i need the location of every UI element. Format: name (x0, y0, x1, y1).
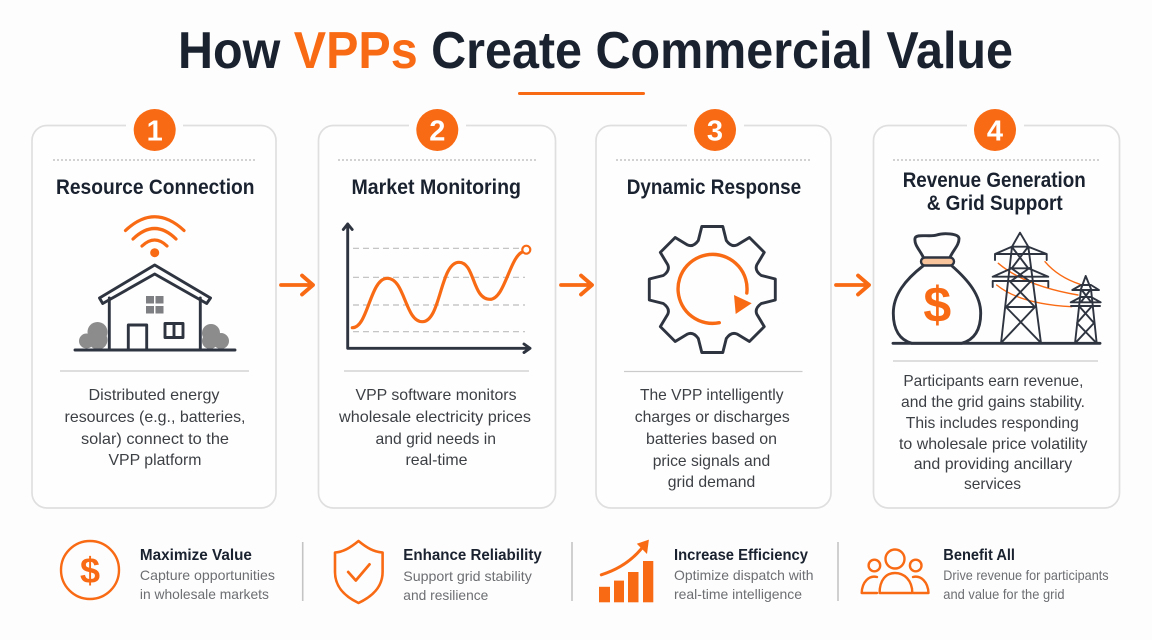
text: step 2 description: wholesale electricity prices (338, 409, 531, 426)
icon: shield check (335, 541, 383, 603)
line chart: price curve (343, 224, 530, 352)
badge 1 (134, 109, 176, 151)
benefit: maximize value: in wholesale markets (140, 587, 269, 602)
text: step 3 description: batteries based on (646, 431, 777, 448)
text: step 3 description: The VPP intelligently (640, 387, 784, 404)
benefit: enhance reliability: Enhance Reliability (403, 547, 542, 564)
icon: money bag: $ (923, 277, 951, 333)
badge 3: 3 (707, 116, 723, 148)
benefit: enhance reliability (335, 541, 542, 603)
arrow: step 2 to 3 (561, 276, 592, 294)
text: step 3 description: charges or discharges (635, 409, 790, 426)
badge 3 (694, 109, 736, 151)
text: step 4 description: to wholesale price volatility (899, 436, 1088, 453)
benefit: increase efficiency: Increase Efficiency (674, 547, 808, 564)
icon: transmission towers (893, 233, 1101, 343)
heading: revenue generation and grid support: Revenue Generation (903, 168, 1086, 192)
title: How VPPs Create Commercial Value (178, 22, 1013, 80)
icon: rising bars with arrow (599, 540, 653, 602)
text: step 4 description: and the grid gains stability. (901, 394, 1085, 411)
panel: step 2 market monitoring (318, 109, 556, 508)
panel: step 4 revenue generation and grid support (874, 109, 1120, 508)
badge 2 (416, 109, 458, 151)
icon: dollar circle (61, 541, 119, 599)
heading: dynamic response: Dynamic Response (627, 175, 801, 199)
benefit: increase efficiency: Optimize dispatch with (674, 568, 814, 583)
text: step 4 description: This includes responding (906, 415, 1079, 432)
text: step 3 description: price signals and (653, 453, 770, 470)
icon: house with wifi (75, 217, 235, 350)
text: step 4 description (899, 373, 1088, 493)
text: step 1 description: resources (e.g., batteries, (64, 409, 246, 426)
text: step 2 description (338, 387, 531, 469)
icon: gear with cycle arrow (649, 226, 775, 352)
benefit: enhance reliability: Support grid stability (403, 569, 532, 584)
benefit: increase efficiency (599, 540, 814, 602)
benefit: maximize value: Maximize Value (140, 547, 252, 564)
heading: resource connection: Resource Connection (56, 175, 254, 199)
badge 4: 4 (987, 116, 1003, 148)
text: step 2 description: real-time (406, 452, 468, 469)
arrow: step 1 to 2 (281, 276, 313, 294)
title underline (518, 92, 645, 95)
badge 2: 2 (429, 116, 445, 148)
icon: money bag (893, 234, 981, 343)
icon: three people (862, 550, 928, 593)
text: step 1 description: Distributed energy (88, 387, 220, 404)
badge 1: 1 (147, 116, 163, 148)
text: step 3 description (635, 387, 790, 491)
benefit: benefit all: and value for the grid (943, 587, 1064, 602)
text: step 4 description: Participants earn revenue, (903, 373, 1083, 390)
icon: dollar circle: $ (80, 550, 100, 591)
text: step 1 description: solar) connect to the (81, 431, 229, 448)
text: step 4 description: and providing ancillary (914, 456, 1072, 473)
benefit: maximize value (61, 541, 275, 602)
benefit: benefit all: Drive revenue for participants (943, 568, 1109, 583)
benefit: maximize value: Capture opportunities (140, 568, 275, 583)
text: step 2 description: and grid needs in (376, 431, 496, 448)
text: step 3 description: grid demand (668, 474, 755, 491)
heading: revenue generation and grid support (903, 168, 1086, 215)
text: step 1 description (64, 387, 246, 469)
benefit: benefit all: Benefit All (943, 547, 1015, 564)
text: step 1 description: VPP platform (108, 452, 202, 469)
text: step 4 description: services (964, 476, 1021, 493)
arrow: step 3 to 4 (836, 276, 869, 294)
heading: market monitoring: Market Monitoring (352, 175, 521, 199)
text: step 2 description: VPP software monitors (356, 387, 516, 404)
heading: revenue generation and grid support: & Grid Support (927, 191, 1063, 215)
benefit: enhance reliability: and resilience (403, 588, 489, 603)
panel: step 3 dynamic response (596, 109, 831, 508)
benefit: increase efficiency: real-time intelligence (674, 587, 802, 602)
benefit: benefit all (862, 547, 1109, 602)
panel: step 1 resource connection (32, 109, 276, 508)
badge 4 (974, 109, 1016, 151)
